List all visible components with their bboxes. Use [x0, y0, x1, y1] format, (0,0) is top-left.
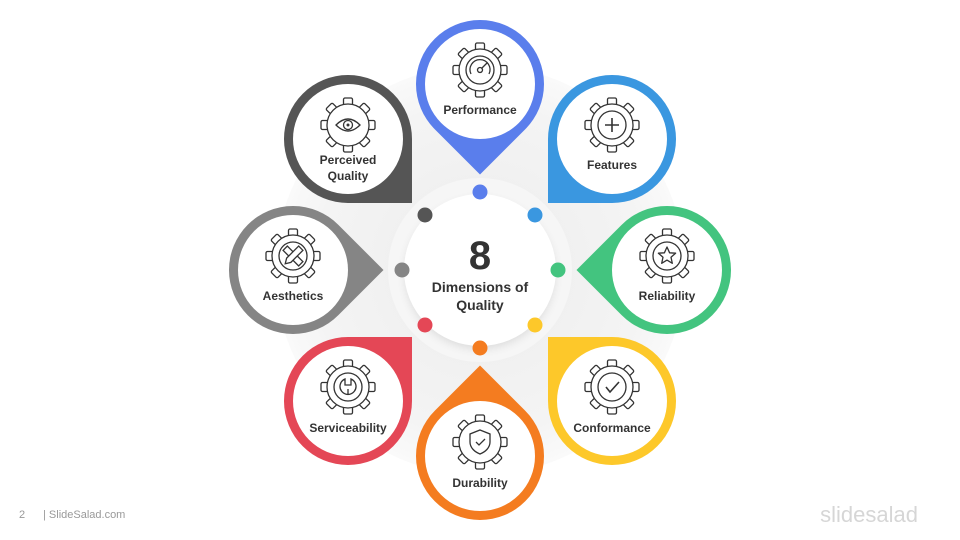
center circle: Dimensions of: [432, 279, 529, 295]
pin: perceived quality: [257, 48, 457, 248]
icon: eye gear: [321, 98, 375, 152]
connector dots: [394, 184, 566, 356]
label: Conformance: Conformance: [573, 421, 651, 435]
label: Perceived Quality: Quality: [328, 169, 369, 183]
icon: pencil ruler gear: [266, 229, 320, 283]
pin: reliability: [576, 206, 731, 334]
background circle: [275, 65, 685, 475]
footer: website: | SlideSalad.com: [43, 509, 125, 521]
pin: conformance: [503, 292, 703, 492]
label: Aesthetics: Aesthetics: [263, 289, 324, 303]
label: Reliability: Reliability: [639, 289, 696, 303]
label: Features: Features: [587, 158, 637, 172]
label: Perceived Quality: Perceived: [320, 153, 376, 167]
pin: durability: [416, 366, 544, 520]
footer: page number: 2: [19, 509, 25, 521]
pin: aesthetics: [229, 206, 384, 334]
pin: performance: [416, 20, 544, 174]
center circle: [388, 178, 572, 362]
logo: slidesalad: slidesalad: [820, 502, 918, 527]
label: Performance: Performance: [443, 103, 517, 117]
icon: plus gear: [585, 98, 639, 152]
icon: star gear: [640, 229, 694, 283]
pin: features: [503, 48, 703, 248]
pin: serviceability: [257, 292, 457, 492]
icon: shield gear: [453, 415, 507, 469]
title: 8 Dimensions of Quality: 8: [469, 234, 491, 278]
icon: wrench gear: [321, 360, 375, 414]
label: Durability: Durability: [452, 476, 508, 490]
center circle: Quality: [456, 297, 504, 313]
label: Serviceability: Serviceability: [309, 421, 387, 435]
icon: gauge gear: [453, 43, 507, 97]
icon: check gear: [585, 360, 639, 414]
